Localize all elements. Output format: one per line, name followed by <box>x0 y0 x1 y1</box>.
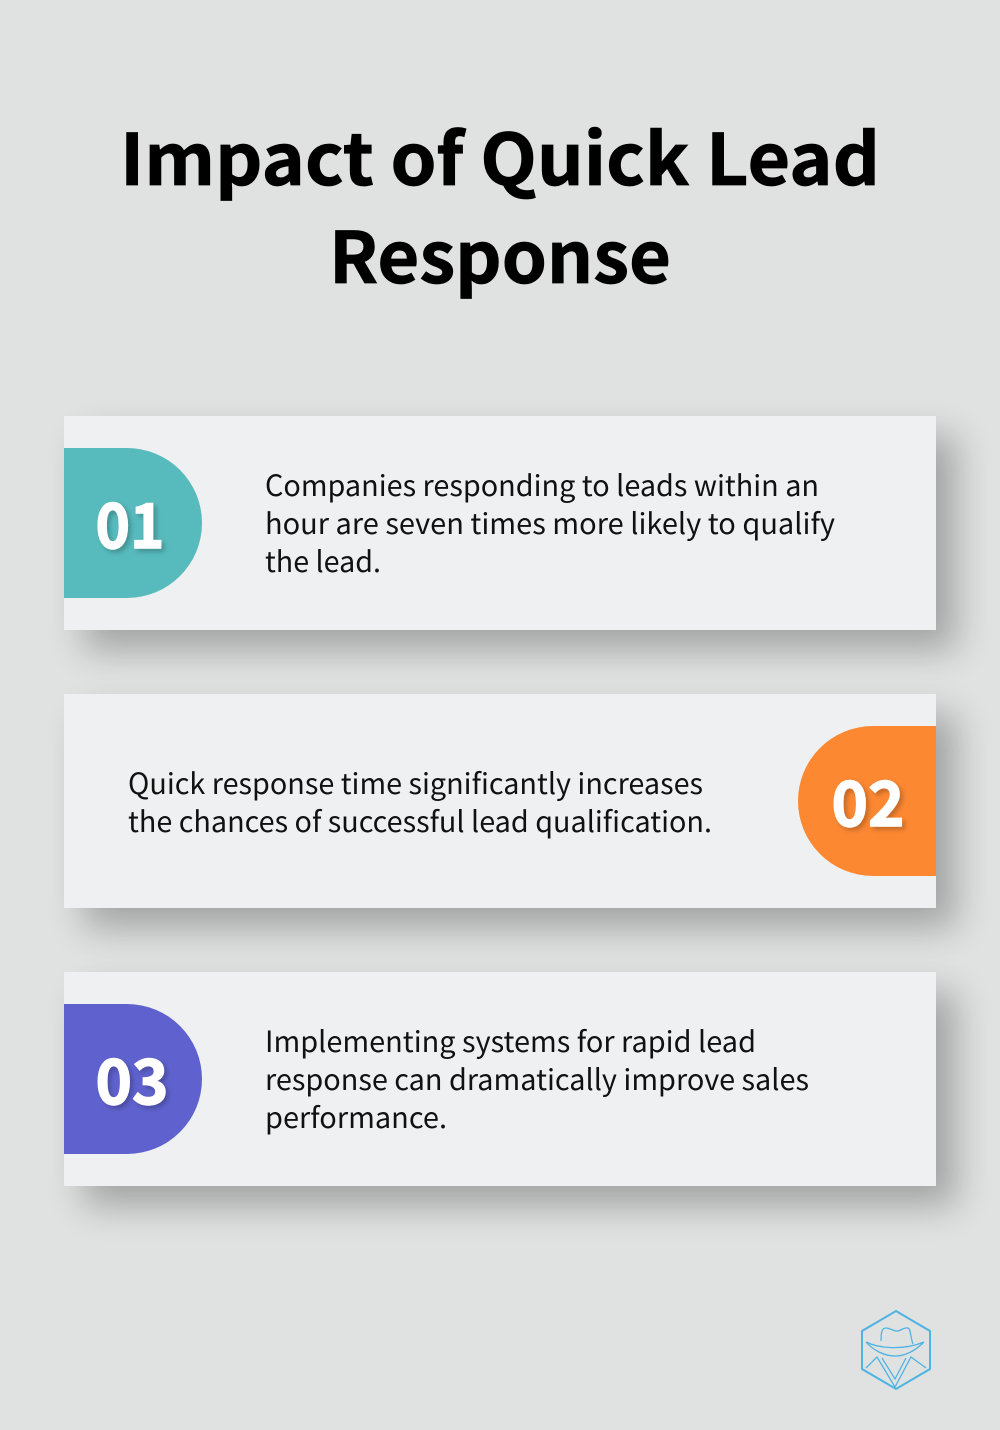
title: Impact of Quick Lead <box>120 104 880 206</box>
text 03: response can dramatically improve sales <box>265 1057 809 1099</box>
text 03: performance. <box>265 1095 447 1137</box>
text 02 <box>128 761 712 841</box>
badge 02: 02 <box>832 754 904 844</box>
icon: logo hexagon with hat <box>862 1311 930 1389</box>
panel: step 01 <box>64 416 956 650</box>
text 01 <box>265 463 835 581</box>
badge 03: 03 <box>96 1032 168 1122</box>
badge 03 <box>64 1004 202 1154</box>
panel: step 03 <box>64 972 956 1206</box>
title: Response <box>329 202 671 304</box>
badge 01 <box>64 448 202 598</box>
text 01: hour are seven times more likely to qualify <box>265 501 835 543</box>
text 02: the chances of successful lead qualification. <box>128 799 712 841</box>
badge 02 <box>798 726 936 876</box>
text 02: Quick response time significantly increases <box>128 761 703 803</box>
title <box>120 104 880 304</box>
text 01: the lead. <box>265 539 381 581</box>
panel: step 02 <box>64 694 956 928</box>
text 03 <box>265 1019 809 1137</box>
text 01: Companies responding to leads within an <box>265 463 819 505</box>
text 03: Implementing systems for rapid lead <box>265 1019 756 1061</box>
badge 01: 01 <box>96 476 164 566</box>
